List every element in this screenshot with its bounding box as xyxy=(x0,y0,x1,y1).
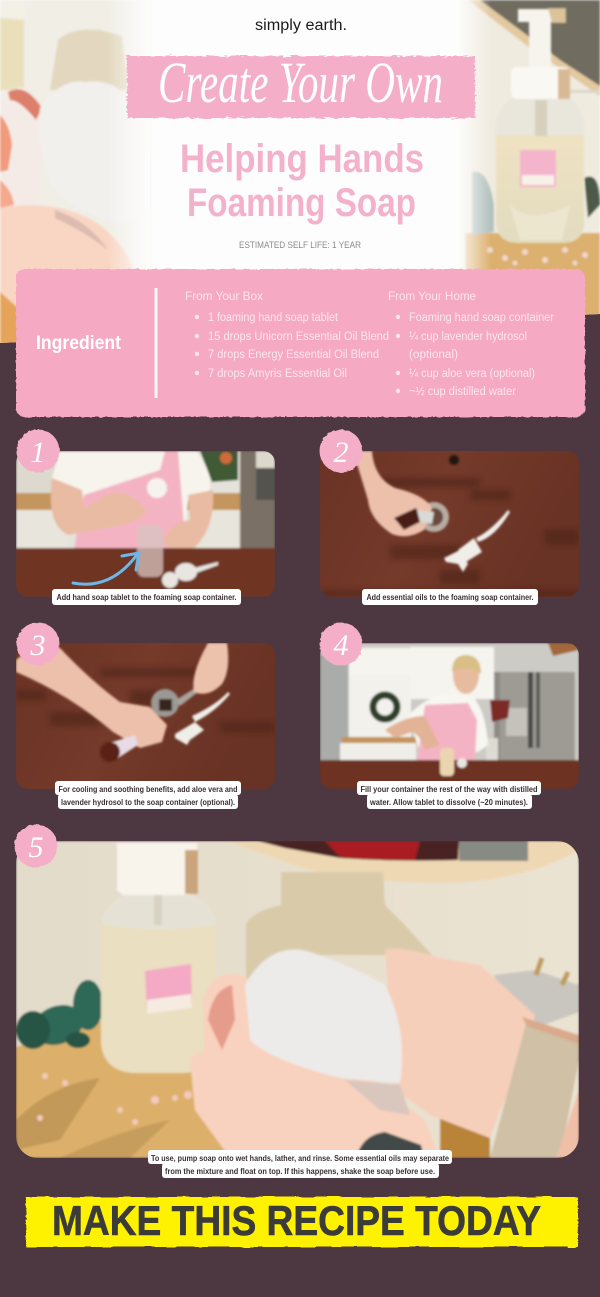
right photo: bottle xyxy=(464,0,600,315)
caption 3: For cooling and soothing benefits, add aloe vera and xyxy=(58,785,238,794)
recipe title xyxy=(180,137,424,225)
script heading: Create Your Own xyxy=(158,50,443,115)
caption 5 xyxy=(148,1150,452,1178)
recipe title: Foaming Soap xyxy=(187,181,416,225)
white fade left xyxy=(114,0,150,270)
photo: lather in hands with bottle xyxy=(16,841,579,1158)
badge 4 xyxy=(320,622,362,666)
badge 1: 1 xyxy=(30,436,46,469)
list: from your box: 7 drops Amyris Essential Oil xyxy=(208,368,347,380)
list: from your box: 15 drops Unicorn Essential Oil Blend xyxy=(208,331,389,343)
hero header photo xyxy=(0,0,600,345)
white fade right xyxy=(460,0,489,270)
list: from your home: Foaming hand soap container xyxy=(409,312,554,324)
ingredient heading: Ingredient xyxy=(36,333,122,354)
list: from your box: 7 drops Energy Essential Oil Blend xyxy=(208,349,379,361)
badge 5 xyxy=(14,824,58,868)
brush band xyxy=(127,56,475,118)
panel: ingredients xyxy=(16,269,585,417)
caption 2: Add essential oils to the foaming soap container. xyxy=(366,593,534,602)
caption 5: from the mixture and float on top. If this happens, shake the soap before use. xyxy=(165,1167,435,1176)
caption 3 xyxy=(55,781,241,809)
list: from your home: ~½ cup distilled water xyxy=(409,386,516,398)
list: from your home: ¼ cup aloe vera (optional) xyxy=(409,368,535,380)
badge 5: 5 xyxy=(28,831,44,864)
photo: adding essential oils xyxy=(320,451,579,597)
photo: dropping tablet into bottle xyxy=(16,451,275,597)
step 4 xyxy=(320,622,579,809)
list: from your home: From Your Home xyxy=(388,291,476,303)
step 2 xyxy=(320,430,579,605)
list: from your home: (optional) xyxy=(409,349,458,361)
caption 3: lavender hydrosol to the soap container (optional). xyxy=(61,798,235,807)
list: from your box: 1 foaming hand soap tablet xyxy=(208,312,339,324)
caption 2 xyxy=(362,589,538,605)
yellow brush strip xyxy=(26,1197,578,1247)
caption 4: water. Allow tablet to dissolve (~20 minutes). xyxy=(369,798,528,807)
badge 3: 3 xyxy=(30,629,46,662)
brand logo: simply earth. xyxy=(255,17,347,34)
list: from your box: From Your Box xyxy=(185,291,263,303)
call to action banner xyxy=(26,1197,578,1247)
title banner: create your own xyxy=(127,50,475,118)
badge 3 xyxy=(16,622,60,666)
recipe title: Helping Hands xyxy=(180,137,424,181)
photo: filling with water in kitchen xyxy=(320,643,579,789)
badge 2 xyxy=(320,430,362,472)
caption 1 xyxy=(52,589,241,605)
arrow: blue curve xyxy=(73,553,139,584)
caption 4 xyxy=(357,781,541,809)
caption 1: Add hand soap tablet to the foaming soap container. xyxy=(56,593,236,602)
caption 5: To use, pump soap onto wet hands, lather, and rinse. Some essential oils may separate xyxy=(151,1154,449,1163)
cta text: MAKE THIS RECIPE TODAY xyxy=(52,1197,541,1244)
step 5 xyxy=(14,824,579,1178)
badge 2: 2 xyxy=(334,436,348,469)
panel background xyxy=(16,269,585,417)
list: from your box xyxy=(185,291,389,380)
list: from your home xyxy=(388,291,554,398)
step 1 xyxy=(16,430,275,605)
badge 1 xyxy=(16,430,60,472)
badge 4: 4 xyxy=(334,629,348,662)
caption 4: Fill your container the rest of the way with distilled xyxy=(360,785,538,794)
shelf life note: ESTIMATED SELF LIFE: 1 YEAR xyxy=(239,240,361,251)
step 3 xyxy=(16,622,275,809)
divider xyxy=(154,288,158,398)
soap bottle xyxy=(496,8,584,243)
list: from your home: ¼ cup lavender hydrosol xyxy=(409,331,527,343)
left photo: foam in hands xyxy=(0,0,150,345)
photo: adding aloe vera and hydrosol xyxy=(16,640,275,789)
